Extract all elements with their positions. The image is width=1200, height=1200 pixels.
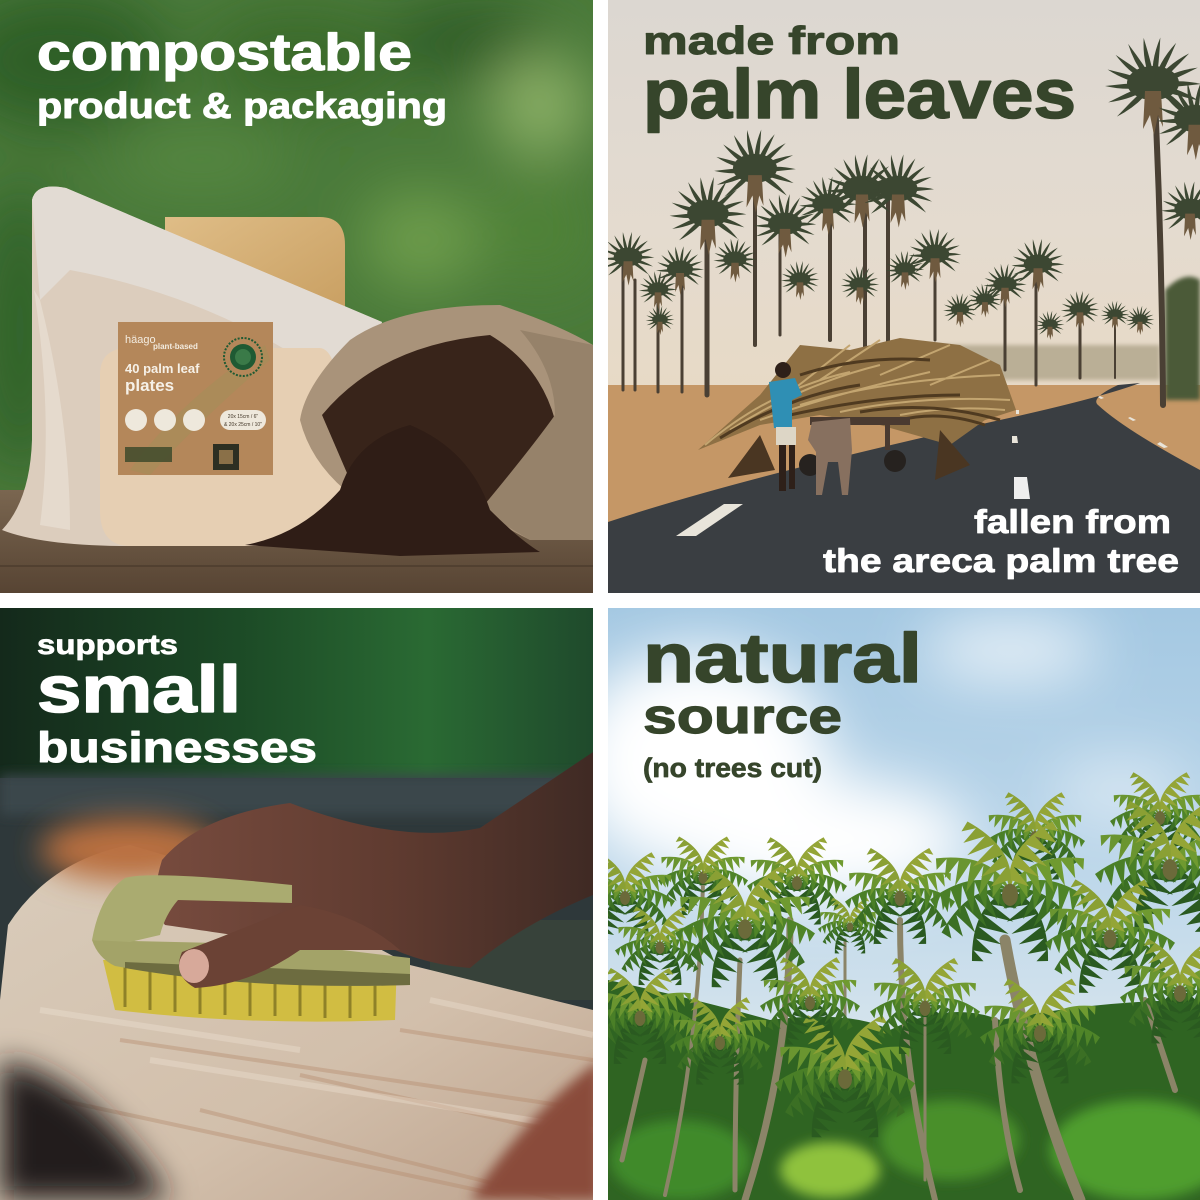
heading: made from palm leaves: made from (643, 20, 900, 63)
heading: natural source: (no trees cut) (643, 753, 822, 783)
panel: compostable product and packaging (0, 0, 600, 593)
man in blue shirt (769, 362, 802, 491)
wooden plank (0, 818, 593, 1200)
heading: supports small businesses: businesses (37, 724, 317, 772)
blurred foreground arm (470, 1060, 600, 1200)
heading (37, 24, 447, 126)
thumbnail (179, 949, 209, 983)
cart loaded with palm leaves (698, 338, 1016, 480)
heading: made from palm leaves (643, 20, 1076, 133)
blurred dark foreground corner (0, 1060, 170, 1200)
hazy sky (608, 0, 1200, 420)
wooden table (0, 490, 593, 593)
heading: natural source: source (643, 690, 842, 744)
panel: made from palm leaves (602, 0, 1200, 593)
palm tree crowns (602, 37, 1200, 340)
product label: plates (125, 376, 174, 395)
spilled compost soil (245, 425, 540, 556)
caption: fallen from the areca palm tree: fallen from (974, 503, 1171, 540)
brush handle (92, 875, 292, 942)
product label: & 20x 25cm / 10" (224, 422, 262, 428)
heading: made from palm leaves: palm leaves (643, 55, 1076, 133)
product label (118, 322, 273, 475)
heading: natural source (643, 619, 922, 783)
heading: compostable (37, 24, 412, 82)
caption: fallen from the areca palm tree: the areca palm tree (823, 542, 1179, 579)
caption: fallen from the areca palm tree (823, 503, 1179, 579)
coconut palm crowns (574, 767, 1200, 1144)
asphalt road (608, 383, 1200, 593)
plastic compostable bag (2, 186, 382, 546)
donkey (808, 418, 852, 495)
product label: 20x 15cm / 6" (228, 414, 258, 420)
heading: product & packaging (37, 85, 447, 126)
product label: häago (125, 334, 156, 346)
coconut palm trunks (622, 880, 1175, 1200)
product label: 40 palm leaf (125, 361, 200, 376)
lower jungle foliage (608, 980, 1200, 1200)
hand holding the brush (156, 752, 593, 968)
palm leaf plate behind the bag (165, 217, 345, 306)
heading: supports small businesses (38, 635, 316, 763)
blurred green and grey background (0, 608, 593, 1010)
panel: supports small businesses (0, 608, 600, 1200)
dry ground (608, 385, 1200, 522)
panel: natural source (570, 608, 1200, 1200)
heading: supports small businesses: small (37, 652, 241, 726)
heading: supports small businesses: supports (37, 629, 178, 660)
heading: natural source: natural (643, 619, 922, 697)
blue sky (608, 608, 1200, 1030)
white clouds (570, 622, 1190, 900)
palm tree trunks (623, 100, 1163, 405)
product label: plant-based (153, 342, 198, 351)
distant haze and tree line (946, 273, 1200, 403)
scrubbing brush bristles and base (92, 940, 410, 1022)
blurred green foliage background (0, 0, 593, 490)
burlap sack (300, 305, 593, 540)
thumb (179, 923, 400, 988)
